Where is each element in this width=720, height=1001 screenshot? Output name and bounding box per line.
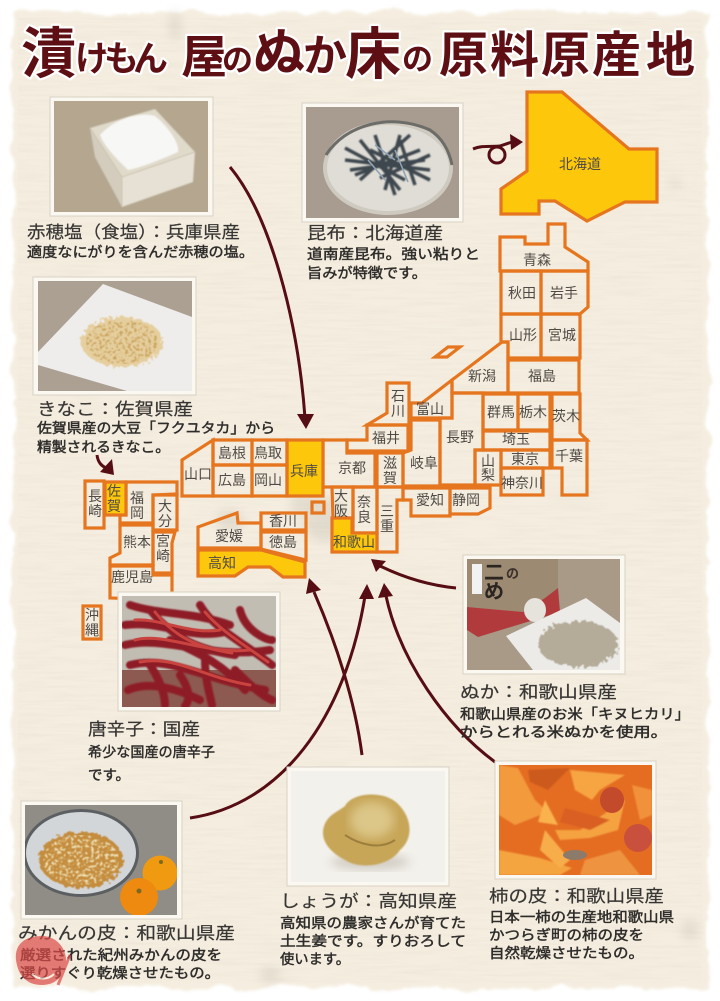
caption: salt [27,223,254,260]
Chugoku and Shikoku prefectures: 鳥取 [254,445,282,461]
caption: salt: 適度なにがりを含んだ赤穂の塩。 [27,244,254,260]
caption: mikan peel: みかんの皮：和歌山県産 [18,924,235,943]
caption: chili: 唐辛子：国産 [88,720,200,739]
arrow: salt to Hyogo [230,167,314,429]
photo: nuka: め [484,581,504,603]
Chugoku and Shikoku prefectures: 広島 [218,472,246,488]
Chubu and Kansai prefectures: 福井 [372,430,400,446]
Tohoku and Kanto prefectures: 栃木 [519,404,547,420]
Kyushu and Okinawa prefectures: 縄 [85,622,99,638]
arrow: nuka to Wakayama [371,559,456,588]
caption: kelp: 昆布：北海道産 [307,224,443,243]
photo: nuka [463,555,625,674]
photo: chili peppers [118,592,280,711]
Kyushu and Okinawa prefectures: 鹿児島 [111,569,153,585]
caption: kelp [307,224,480,281]
caption: persimmon peel: かつらぎ町の柿の皮を [489,927,644,943]
Kyushu and Okinawa prefectures: 宮 [156,533,170,549]
Tohoku and Kanto prefectures: 山形 [509,327,537,343]
caption: kinako: きなこ：佐賀県産 [37,400,193,419]
arrow: kinako to Saga [97,455,114,475]
caption: kelp: 道南産昆布。強い粘りと [307,246,480,262]
caption: persimmon peel: 日本一柿の生産地和歌山県 [489,909,674,925]
Tohoku and Kanto prefectures: 秋田 [508,285,536,301]
Tohoku and Kanto prefectures: 神奈川 [501,475,543,491]
Kyushu and Okinawa prefectures: 岡 [130,505,144,521]
caption: nuka: からとれる米ぬかを使用。 [460,724,668,740]
Tohoku and Kanto prefectures: 青森 [523,252,551,268]
photo: salt [50,97,213,216]
Kyushu and Okinawa prefectures: 長 [88,488,102,504]
photo: kinako [33,277,196,395]
caption: mikan peel: 厳選された紀州みかんの皮を [20,947,222,963]
caption: ginger: 高知県の農家さんが育てた [280,915,466,931]
caption: persimmon peel: 自然乾燥させたもの。 [489,945,644,961]
caption: chili: です。 [88,767,130,783]
Chugoku and Shikoku prefectures [182,440,306,577]
photo: nuka: の [506,566,519,581]
Chubu and Kansai prefectures: 大 [334,488,348,504]
Chubu and Kansai prefectures: 静岡 [452,492,480,508]
Chugoku and Shikoku prefectures: 島根 [218,445,246,461]
arrow: persimmon to Wakayama [378,583,495,762]
Chubu and Kansai prefectures: 兵庫 [290,463,318,479]
photo: kelp [302,103,463,222]
Tohoku and Kanto prefectures [435,224,588,495]
Hokkaido (highlighted): 北海道 [559,156,601,172]
Tohoku and Kanto prefectures: 茨木 [552,408,580,424]
Chubu and Kansai prefectures: 川 [391,403,405,419]
caption: kinako: 精製されるきなこ。 [37,439,170,455]
caption: chili [88,720,215,783]
arrow: ginger to Kochi [306,578,362,755]
Kyushu and Okinawa prefectures: 崎 [156,548,170,564]
Chubu and Kansai prefectures: 富山 [416,401,444,417]
Chubu and Kansai prefectures: 和歌山 [333,534,375,550]
map of Japan [83,92,657,639]
caption: kelp: 旨みが特徴です。 [307,265,427,281]
Chugoku and Shikoku prefectures: 愛媛 [215,528,243,544]
arrow: mikan to Wakayama [190,584,374,818]
Chubu and Kansai prefectures: 滋 [383,455,397,471]
Kyushu and Okinawa prefectures: 崎 [88,503,102,519]
Chugoku and Shikoku prefectures: 徳島 [269,534,297,550]
Tohoku and Kanto prefectures: 梨 [481,467,495,483]
Chubu and Kansai prefectures: 岐阜 [410,455,438,471]
Kyushu and Okinawa prefectures: 賀 [107,498,121,514]
Kyushu and Okinawa prefectures: 分 [158,513,172,529]
Tohoku and Kanto prefectures: 埼玉 [502,431,530,447]
Kyushu and Okinawa prefectures: 大 [158,498,172,514]
Chubu and Kansai prefectures: 奈 [357,494,371,510]
stamp: red face seal [16,936,70,985]
Tohoku and Kanto prefectures: 群馬 [487,404,515,420]
title: 床 [345,23,401,86]
Chugoku and Shikoku prefectures: 香川 [269,513,297,529]
Kyushu and Okinawa prefectures: 沖 [85,607,99,623]
title: か [303,32,347,81]
Tohoku and Kanto prefectures: 岩手 [550,285,578,301]
Chubu and Kansai prefectures: 長野 [446,429,474,445]
caption: nuka: ぬか：和歌山県産 [460,683,617,702]
caption: persimmon peel: 柿の皮：和歌山県産 [489,887,664,906]
Kyushu and Okinawa prefectures: 佐 [107,483,121,499]
title: 原料原産地 [439,29,695,83]
title: 屋 [181,31,227,83]
Chubu and Kansai prefectures [287,380,490,552]
caption: ginger [280,892,466,967]
caption: nuka: 和歌山県産のお米「キヌヒカリ」 [460,706,690,722]
title: ぬ [253,25,305,83]
caption: salt: 赤穂塩（食塩）：兵庫県産 [27,223,240,242]
title: けもん [75,40,168,79]
photo: ginger [287,767,449,886]
Chugoku and Shikoku prefectures: 高知 [208,555,236,571]
Hokkaido (highlighted) [501,92,657,221]
caption: persimmon peel [489,887,674,961]
Tohoku and Kanto prefectures: 千葉 [555,448,583,464]
Kyushu and Okinawa prefectures: 熊本 [123,534,151,550]
caption: mikan peel [18,924,235,981]
arrow: loop to Hokkaido [473,134,523,163]
caption: mikan peel: 選りすぐり乾燥させたもの。 [20,965,220,981]
title [21,23,695,86]
Kyushu and Okinawa prefectures: 福 [130,490,144,506]
Kyushu and Okinawa prefectures [83,481,177,639]
photo: mikan peel [21,801,182,919]
Tohoku and Kanto prefectures: 新潟 [468,368,496,384]
Chubu and Kansai prefectures: 三 [380,503,394,519]
Tohoku and Kanto prefectures: 福島 [528,368,556,384]
photo: persimmon peel [495,761,656,879]
photo: nuka: 二 [484,562,504,584]
Tohoku and Kanto prefectures: 東京 [511,451,539,467]
caption: nuka [460,683,690,740]
Chubu and Kansai prefectures: 愛知 [416,492,444,508]
title: 漬 [21,23,76,85]
caption: ginger: 土生姜です。すりおろして [280,933,466,949]
caption: kinako: 佐賀県産の大豆「フクユタカ」から [37,420,275,436]
Chubu and Kansai prefectures: 京都 [338,460,366,476]
Tohoku and Kanto prefectures: 宮城 [548,327,576,343]
caption: chili: 希少な国産の唐辛子 [88,744,215,760]
title: の [222,43,253,78]
Tohoku and Kanto prefectures: 山 [481,453,495,469]
Chubu and Kansai prefectures: 阪 [334,503,348,519]
Chubu and Kansai prefectures: 石 [391,388,405,404]
Chubu and Kansai prefectures: 良 [357,509,371,525]
title: の [402,42,433,77]
Chubu and Kansai prefectures: 重 [380,518,394,534]
Chugoku and Shikoku prefectures: 岡山 [254,472,282,488]
Chubu and Kansai prefectures: 賀 [383,470,397,486]
caption: ginger: しょうが：高知県産 [280,892,457,911]
caption: kinako [37,400,275,455]
caption: ginger: 使います。 [280,951,350,967]
Chugoku and Shikoku prefectures: 山口 [184,466,212,482]
